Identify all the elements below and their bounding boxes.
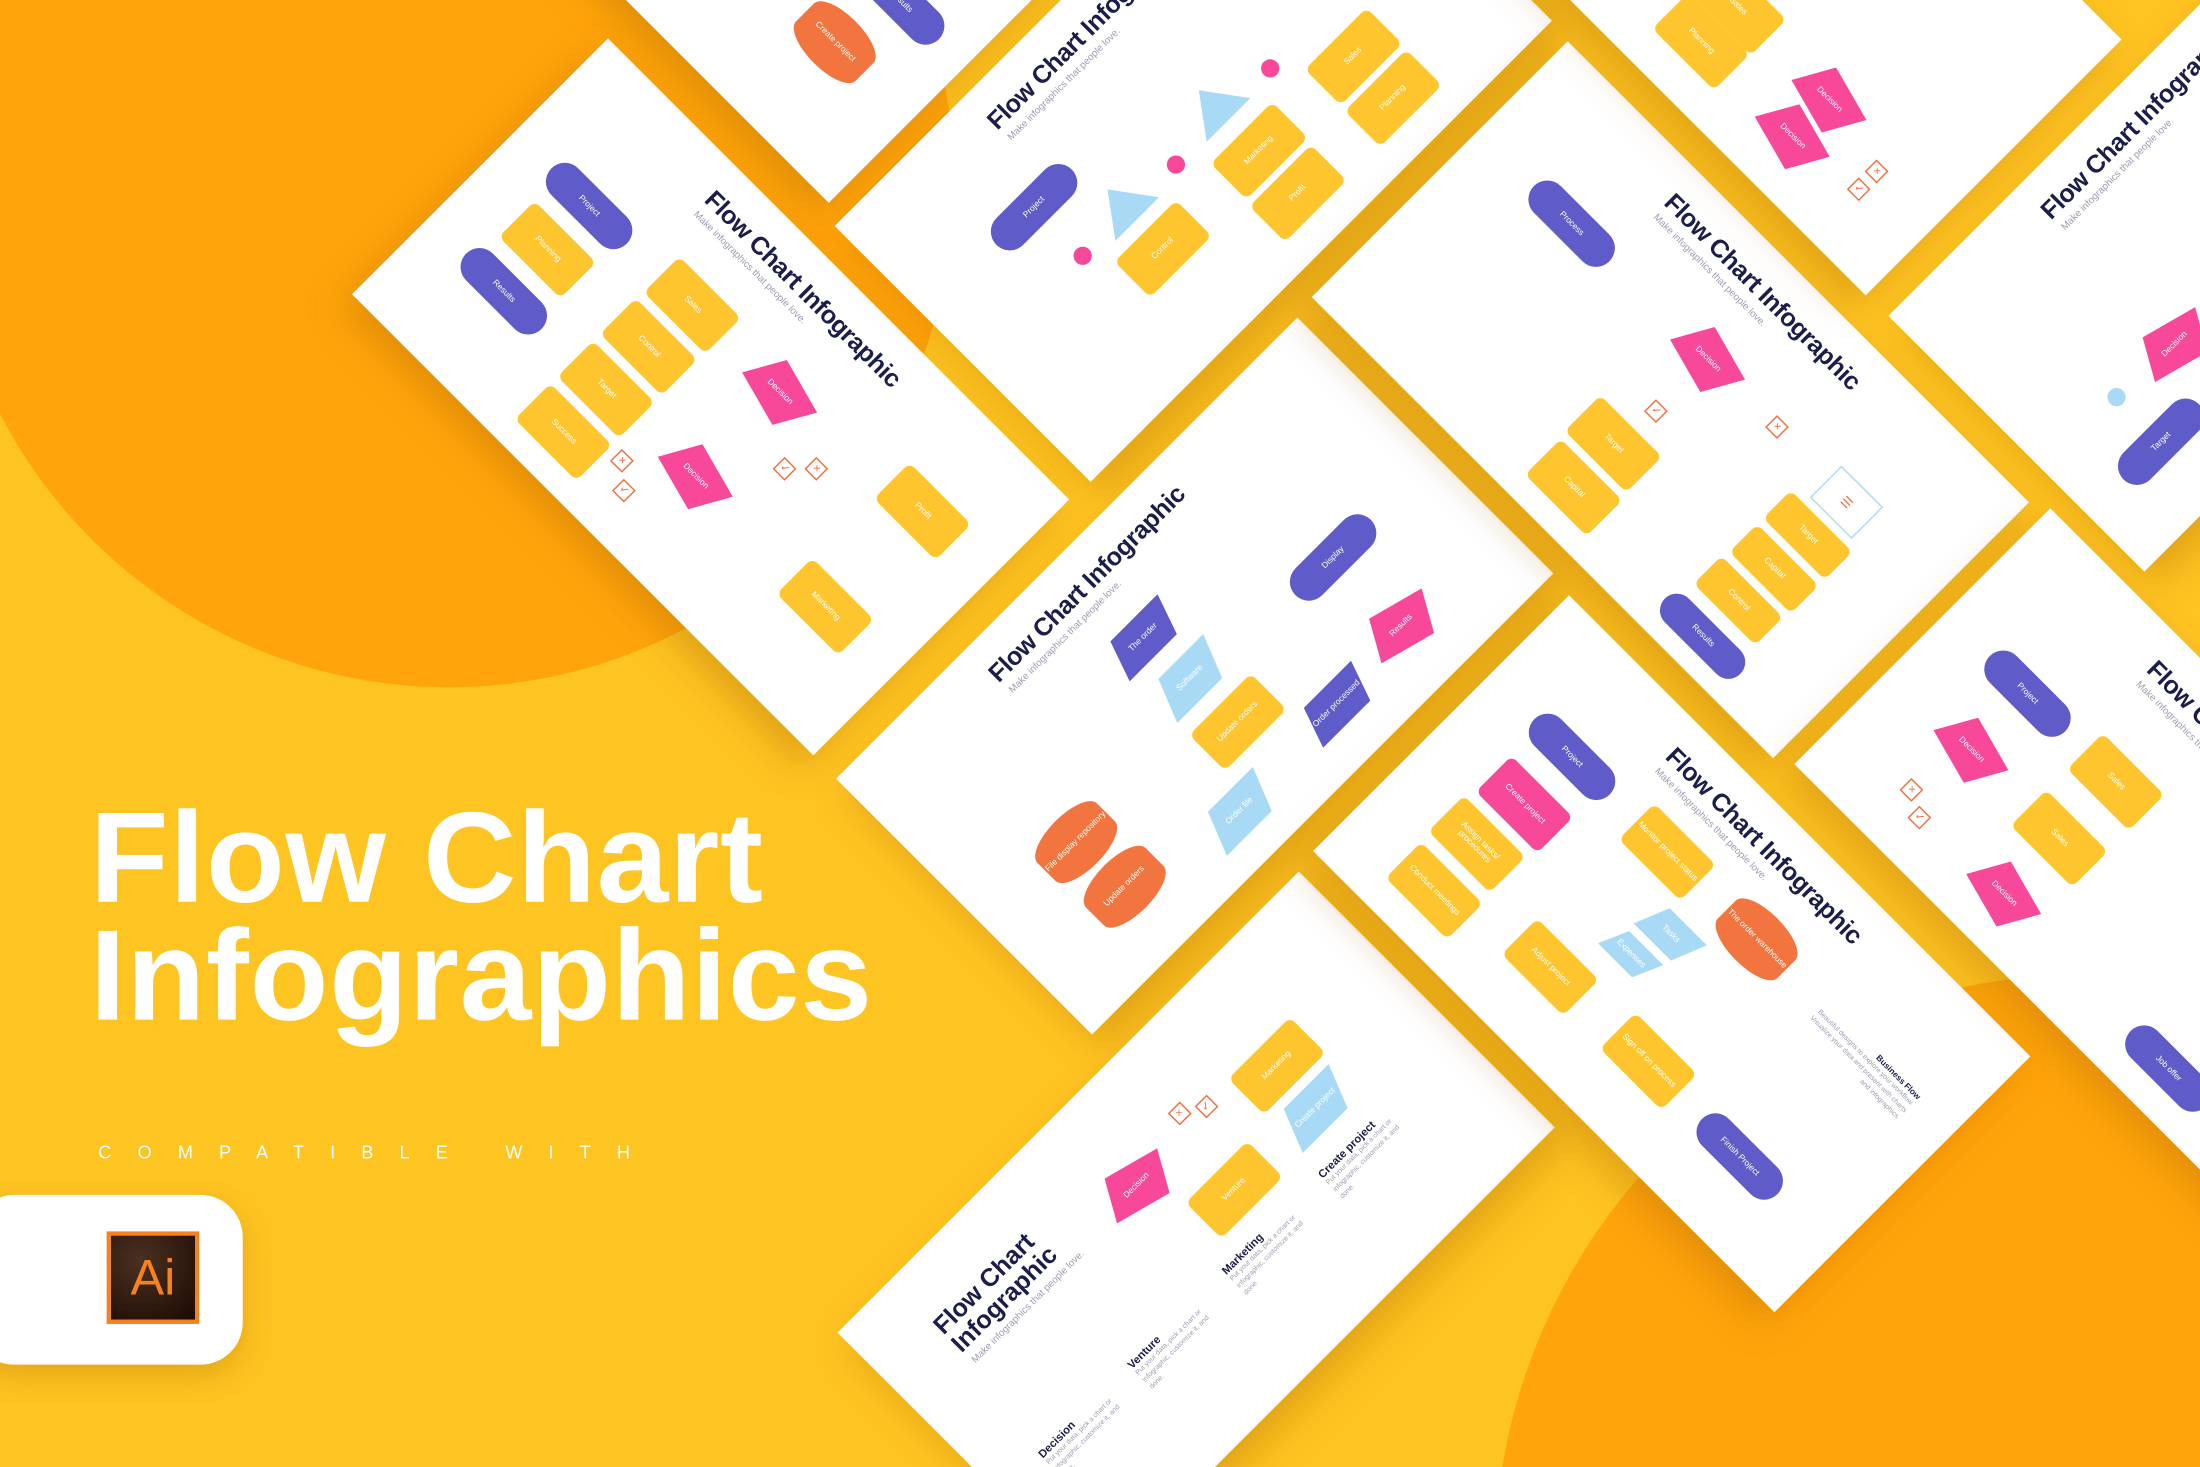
triangle: results [1369,588,1434,664]
box: planning: Planning [1686,27,1715,56]
box: control [1693,556,1782,645]
card B: top middle slide [834,0,1551,482]
box: marketing: Marketing [1243,135,1275,167]
diamond: decision [2142,307,2200,382]
triangle: results: Results [1388,613,1414,639]
box: target: Target [594,378,617,401]
pill: project [1976,643,2078,745]
box: target: Target [1601,433,1624,455]
cylinder: update orders: Update orders [1102,865,1146,909]
card I: far right upper partial [1888,0,2200,572]
diamond: decision 1 [742,360,817,425]
diamond: decision: Decision [2160,330,2189,359]
pill: project [982,156,1084,258]
shapes light blue: Tasks [1659,924,1680,945]
diamond: decision 2 [1754,104,1830,170]
pill: project: Project [2015,681,2039,706]
shape: the order [1110,594,1177,682]
text: business flow: Business Flow [1873,1054,1921,1102]
icons: × [1904,783,1918,796]
box: success: Success [548,418,577,446]
pill: project [537,155,640,257]
icons: × [1172,1106,1185,1120]
text column: create project: Create project [1315,1119,1377,1181]
card E: right upper slide: × [1770,420,1784,433]
cylinder: create project [783,0,885,93]
diamond: decision 2: Decision [1777,122,1806,151]
box: sales [1688,0,1786,55]
compatible with label: COMPATIBLE WITH [98,1142,656,1163]
subtitle: Make infographics that people love. [1650,213,1766,329]
card H: top partial slide [367,0,1084,203]
title two lines: Flow Chart [927,1228,1039,1340]
box: sales [643,257,740,354]
box: control [599,298,697,395]
diamond: decision: Decision [1956,736,1985,765]
box: venture [1185,1141,1282,1238]
box: update orders: Update orders [1215,700,1259,744]
box: adjust project: Adjust project [1528,946,1571,988]
icons [1643,399,1667,423]
pill [849,0,952,53]
box: control: Control [1150,236,1175,261]
box: venture: Venture [1220,1177,1247,1203]
diamond: decision [1104,1148,1170,1224]
box: control: Control [1725,588,1750,613]
box: target [557,341,654,438]
main title [90,787,873,1048]
text column: venture: Put your data, pick a chart or infographic, customize it, and done. [1133,1308,1211,1391]
icon: Adobe Illustrator [107,1231,199,1324]
box: update orders [1189,674,1286,771]
text: business flow: Beautiful designs to explore your workflow. Visualize your data and present with charts and infographics. [1807,1008,1915,1122]
box: marketing [1228,1017,1325,1114]
diamond: decision 2: Decision [680,462,709,491]
cylinder: create project: Create project [812,21,856,64]
box: create project [1475,756,1572,853]
box: sales [1304,8,1401,105]
shape: order file: Order file [1224,796,1254,827]
subtitle: Make infographics that people love. [691,210,807,326]
box: profit [1249,145,1346,242]
box: planning: Planning [532,235,561,264]
cylinder: file display: File display repository [1044,810,1107,874]
shape: order processed: Order processed [1311,679,1362,729]
background circle: bottom-right orange [1494,975,2200,1467]
title: Flow Chart Infographic [1660,742,1867,950]
card A: flow chart slide [351,38,1069,755]
card F: right lower slide [1312,595,2030,1312]
icon: check [772,457,796,481]
diamond: decision [1934,718,2008,783]
background circle: top-left orange [0,0,954,687]
box: assign tasks [1427,796,1525,893]
card F: right lower slide: Expenses [1614,938,1646,970]
card G: top right partial: ✓ [1851,181,1866,197]
box: capital 2: Capital [1761,557,1786,581]
diamond: decision 2: Decision [1989,880,2017,908]
diamond: decision 1: Decision [764,378,793,407]
title: Flow Chart Infographic [982,480,1190,687]
box: success [514,384,611,481]
pill: display [1281,506,1383,609]
pill: job offer [2117,1017,2200,1120]
box: sign off [1599,1013,1696,1110]
subtitle: Make infographics that people love. [2059,116,2175,233]
shape: the order: The order [1127,622,1159,654]
box: target [1564,395,1661,492]
box: profit: Profit [1287,183,1307,203]
icons: × [1870,164,1883,178]
main title: Infographics [90,905,873,1048]
icons: ✓ [1648,403,1664,418]
diamond: decision [1670,327,1745,392]
cylinder: order warehouse [1705,889,1806,990]
diamond: decision 2 [1966,862,2042,926]
pill: job offer: Job offer [2153,1054,2182,1083]
pill: results [1652,587,1751,686]
title two lines: Infographic [945,1240,1062,1357]
card C: center slide [835,317,1553,1035]
shapes light blue [1634,908,1707,960]
icons [1167,1102,1191,1125]
icon: x: × [809,462,823,475]
card J: far right lower partial: ✓ [1911,809,1927,825]
title: Flow Chart Infographic [699,185,906,393]
box: marketing [776,558,873,655]
subtitle: Make infographics that people love. [1006,27,1122,143]
title: Flow Chart Infographic [1658,188,1866,396]
box: adjust project [1501,918,1598,1016]
box: capital: Capital [1561,475,1585,500]
cylinder: file display [1025,792,1126,893]
shape: create project [1284,1064,1348,1153]
triangle B [1176,68,1250,142]
pill: project: Project [576,194,601,218]
diamond: decision 2 [658,444,733,510]
box: sales: Sales [1342,46,1363,67]
subtitle: Make infographics that people love. [970,1249,1086,1365]
icon card [1809,466,1882,539]
box: conduct meetings [1385,842,1482,939]
box: marketing [1210,102,1307,199]
box: marketing: Marketing [808,591,841,623]
box: sales: Sales [681,295,702,316]
box: sales [2066,733,2164,831]
triangle A [1085,168,1158,241]
box: planning: Planning [1378,84,1407,113]
shape: create project: Create project [1293,1087,1337,1130]
cylinder: update orders [1073,836,1175,937]
box: target 2: Target [1796,524,1818,546]
icon: x [804,457,828,481]
icon: x 2: × [615,454,628,467]
icon: Adobe Illustrator: Ai [130,1248,175,1306]
box: create project: Create project [1502,783,1545,826]
box: monitor: Monitor project status [1635,821,1698,883]
box: conduct meetings: Conduct meetings [1406,864,1460,918]
box: capital [1524,439,1622,536]
diamond: decision: Decision [1122,1171,1151,1200]
cylinder: order warehouse: The order warehouse [1725,908,1787,971]
pill: process: Process [1557,210,1585,237]
pill: project: Project [1021,195,1046,219]
icon: x 2 [609,449,633,473]
box: marketing: Marketing [1260,1050,1292,1082]
diamond: decision [1792,68,1866,132]
pill: process [1520,173,1622,275]
pill: target: Target [2149,431,2172,453]
box: monitor [1618,803,1715,901]
pill: display: Display [1320,545,1345,570]
card D: bottom slide [837,871,1554,1467]
icons pink [1069,243,1095,269]
pill: project [1520,706,1622,808]
box: target 2 [1762,490,1852,580]
icon: check 2 [611,479,635,503]
box: planning [498,201,595,298]
icon: check: ✓ [777,461,792,476]
box: planning [1652,0,1749,90]
pill: results: Results [1689,623,1715,649]
text column: decision: Decision [1035,1419,1077,1461]
text column: marketing: Marketing [1219,1231,1265,1277]
box: control [1114,200,1211,297]
text column: marketing: Put your data, pick a chart or infographic, customize it, and done. [1228,1214,1305,1297]
card E: right upper slide [1311,41,2028,758]
text column: venture: Venture [1124,1333,1163,1371]
icon circle [2103,384,2129,410]
pill: finish project [1688,1105,1790,1208]
card G: top right partial [1404,0,2121,295]
box: capital 2 [1729,524,1818,613]
icons [1864,160,1888,183]
box: profit: Profit [912,502,932,521]
shape: order file [1208,767,1272,856]
box: planning [1344,50,1441,147]
text column: create project: Put your data, pick a chart or infographic, customize it, and done. [1324,1118,1401,1201]
main title: Flow Chart [90,787,764,930]
box: sign off: Sign off on process [1619,1033,1676,1090]
box: sales: Sales [2105,772,2126,792]
box: control: Control [635,334,661,359]
card D: bottom slide: ✓ [1198,1098,1213,1114]
icons [1899,778,1923,802]
subtitle: Make infographics that people love. [1007,579,1123,695]
icon: check 2: ✓ [616,482,631,498]
shape: software: Software [1175,664,1204,693]
subtitle: Make infographics that people love. [1652,767,1768,883]
shape: software [1158,634,1222,723]
card J: far right lower partial [1794,508,2200,1225]
diamond: decision: Decision [1814,86,1843,114]
box: profit [873,463,970,560]
box: sales 2: Sales [2048,828,2069,849]
pill: finish project: Finish Project [1718,1135,1760,1177]
box: sales 2 [2010,790,2107,887]
badge: white card [0,1195,243,1365]
icon card: ☰ [1837,493,1855,511]
pill: target [2109,391,2200,493]
shape: order processed [1304,661,1370,748]
pill: project: Project [1559,745,1584,769]
box: assign tasks: Assign tasks/ procedures [1455,821,1500,865]
pill: results [452,240,554,342]
pill: results: Results [490,278,516,304]
diamond: decision: Decision [1692,345,1721,374]
